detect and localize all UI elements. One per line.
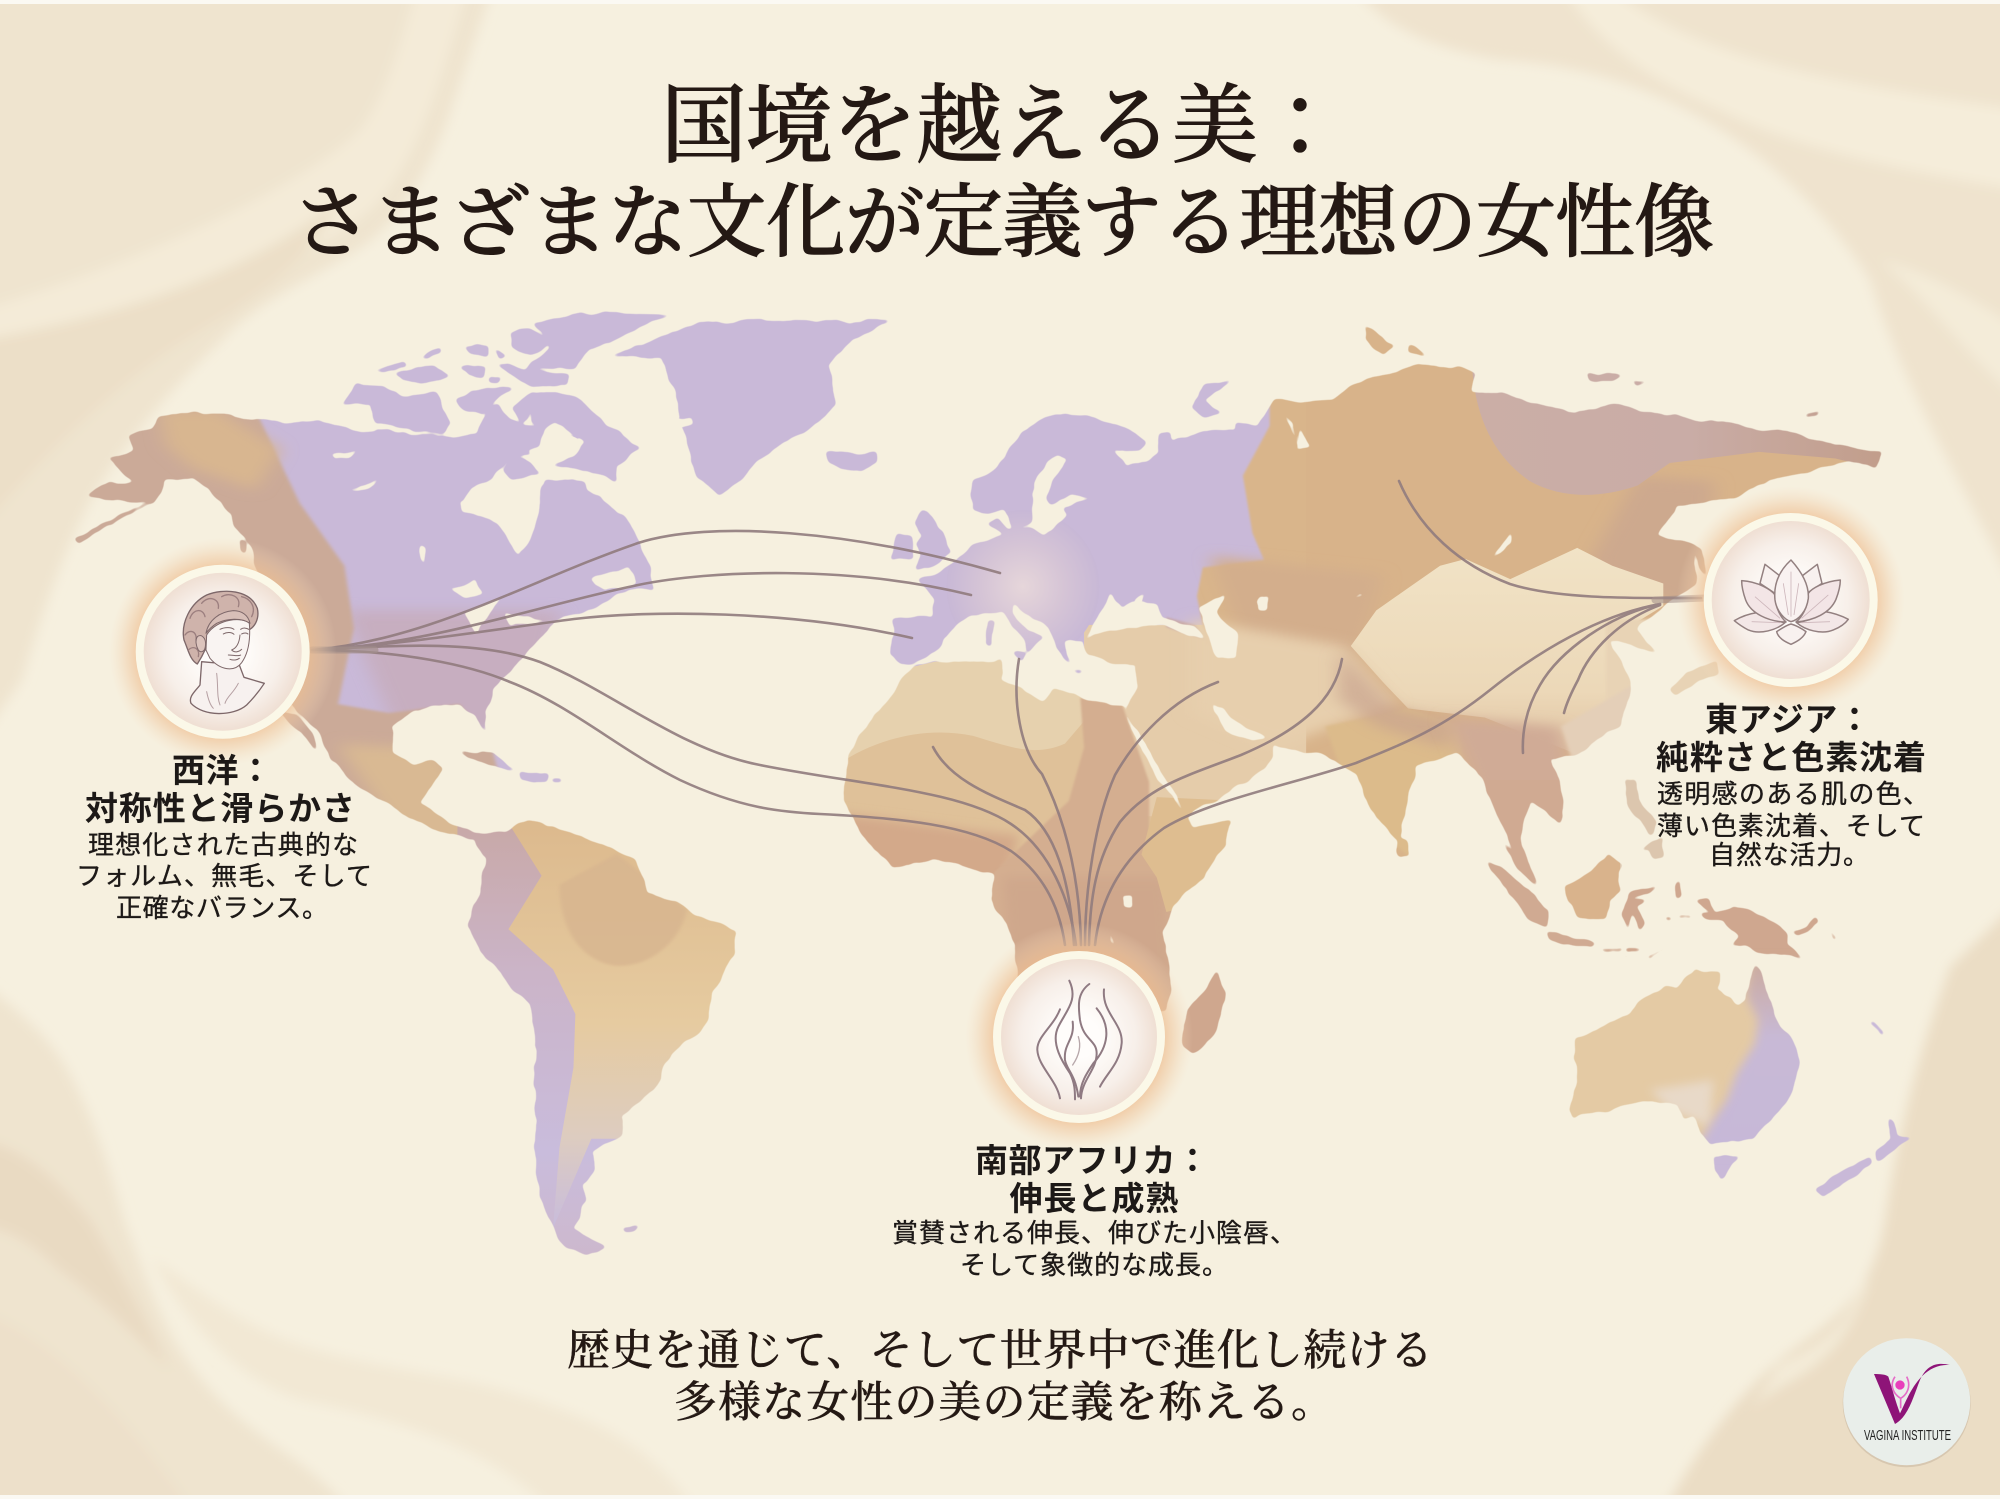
west text block: 対称性と滑らかさ bbox=[85, 790, 355, 827]
east text block: 透明感のある肌の色、 bbox=[1657, 779, 1929, 809]
west text block: フォルム、無毛、そして bbox=[76, 861, 372, 891]
region shading: central and eastern Asia bbox=[1191, 280, 1957, 905]
closing message: 歴史を通じて、そして世界中で進化し続ける bbox=[567, 1328, 1433, 1375]
east text block bbox=[1656, 701, 1929, 870]
region shading: Africa bbox=[844, 625, 1306, 1012]
south text block: そして象徴的な成長。 bbox=[960, 1250, 1228, 1280]
east node: lotus bbox=[1677, 486, 1905, 714]
west node: classical statue bust bbox=[109, 538, 337, 766]
logo: Vagina Institute bbox=[1843, 1338, 1971, 1467]
title: 国境を越える美： bbox=[661, 78, 1343, 174]
region shading: South America bbox=[458, 820, 736, 1254]
south node: flowing lines bbox=[965, 923, 1193, 1151]
west text block: 正確なバランス。 bbox=[116, 893, 328, 923]
connecting flow lines bbox=[312, 481, 1705, 945]
region shading: Madagascar bbox=[1182, 972, 1226, 1054]
region shading: Southeast Asia and Australia bbox=[1489, 780, 1836, 1140]
east text block: 自然な活力。 bbox=[1709, 840, 1869, 870]
south text block: 賞賛される伸長、伸びた小陰唇、 bbox=[892, 1218, 1296, 1248]
title bbox=[292, 78, 1714, 268]
west text block bbox=[76, 752, 372, 923]
east text block: 薄い色素沈着、そして bbox=[1657, 811, 1925, 841]
east text block: 東アジア： bbox=[1705, 701, 1871, 738]
region shading: Europe and western Asia bbox=[946, 265, 1471, 671]
west text block: 西洋： bbox=[172, 752, 272, 789]
south text block: 南部アフリカ： bbox=[975, 1142, 1209, 1179]
east text block: 純粋さと色素沈着 bbox=[1656, 739, 1926, 776]
closing message: 多様な女性の美の定義を称える。 bbox=[674, 1380, 1334, 1427]
closing message bbox=[567, 1328, 1433, 1427]
logo: Vagina Institute: VAGINA INSTITUTE bbox=[1864, 1428, 1951, 1444]
title: さまざまな文化が定義する理想の女性像 bbox=[292, 180, 1714, 268]
south text block: 伸長と成熟 bbox=[1010, 1180, 1178, 1217]
south text block bbox=[892, 1142, 1296, 1280]
world map bbox=[75, 311, 1910, 1255]
region shading: North America bbox=[75, 412, 562, 835]
west text block: 理想化された古典的な bbox=[88, 830, 358, 860]
